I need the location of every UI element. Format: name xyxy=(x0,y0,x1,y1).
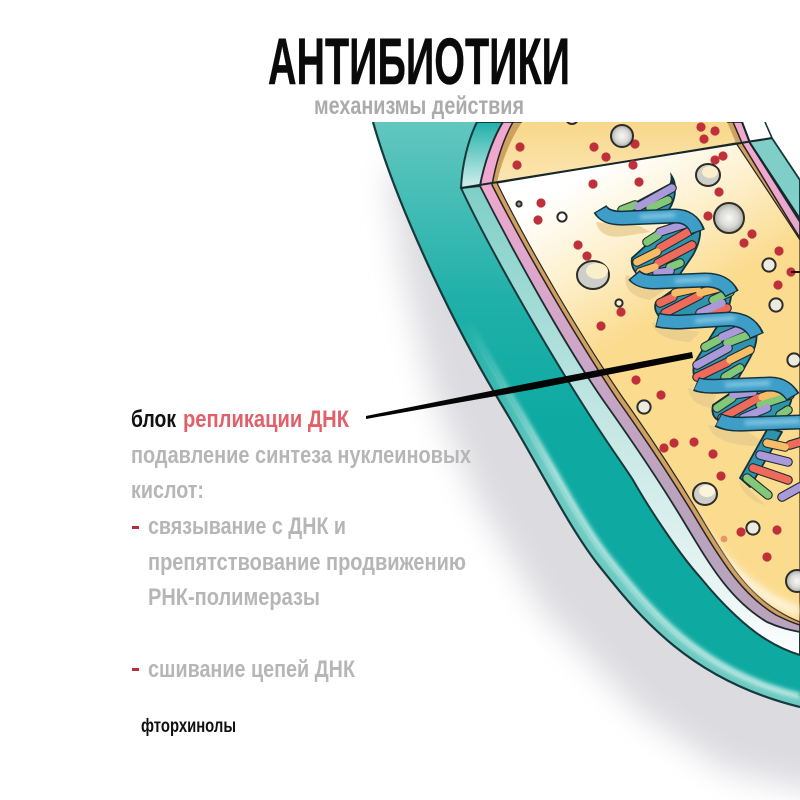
base pair outlines xyxy=(622,188,800,497)
red base pairs xyxy=(658,228,800,480)
cytoplasm interior xyxy=(497,143,800,622)
description text: кислот: xyxy=(131,477,204,504)
cell membrane xyxy=(480,122,800,632)
cytoplasm top section xyxy=(497,122,736,183)
periplasm band xyxy=(461,138,800,655)
description text: препятствование продвижению xyxy=(148,549,466,576)
pointer line xyxy=(366,352,693,419)
ribbon outlines xyxy=(600,209,800,424)
strand tip xyxy=(670,172,676,186)
title: АНТИБИОТИКИ xyxy=(268,24,570,98)
ribbon highlight xyxy=(640,215,800,423)
white notch top right xyxy=(742,122,800,180)
cytoplasm highlight xyxy=(680,500,800,612)
granules xyxy=(516,112,800,592)
green base pairs xyxy=(622,200,790,495)
subtitle: механизмы действия xyxy=(314,92,524,120)
purple base pairs xyxy=(638,188,800,497)
drug class label: фторхинолы xyxy=(141,716,236,737)
description text: подавление синтеза нуклеиновых xyxy=(131,442,472,469)
description text: связывание с ДНК и xyxy=(148,513,346,540)
description text: сшивание цепей ДНК xyxy=(148,656,355,683)
cut plane line xyxy=(461,138,772,188)
top wedge of cell wall xyxy=(461,122,503,188)
helix backing strands xyxy=(620,183,792,487)
description text: РНК-полимеразы xyxy=(148,584,320,611)
illustration: bacterium cross-section xyxy=(373,112,800,795)
outer cell wall xyxy=(373,122,800,707)
cell drop shadow xyxy=(388,150,800,795)
ribosome red dots xyxy=(512,122,796,562)
ribbon fill xyxy=(601,210,800,424)
orange base pairs xyxy=(637,252,785,447)
short pointer stub xyxy=(791,271,800,273)
mechanism heading: репликации ДНК xyxy=(183,406,349,433)
description text xyxy=(131,442,472,683)
brown inner membrane xyxy=(492,122,800,625)
mechanism heading xyxy=(131,406,349,433)
DNA double helix xyxy=(600,172,800,497)
DNA shadow shapes xyxy=(596,222,770,505)
membrane right edge xyxy=(742,122,800,222)
mechanism heading: блок xyxy=(131,406,177,433)
